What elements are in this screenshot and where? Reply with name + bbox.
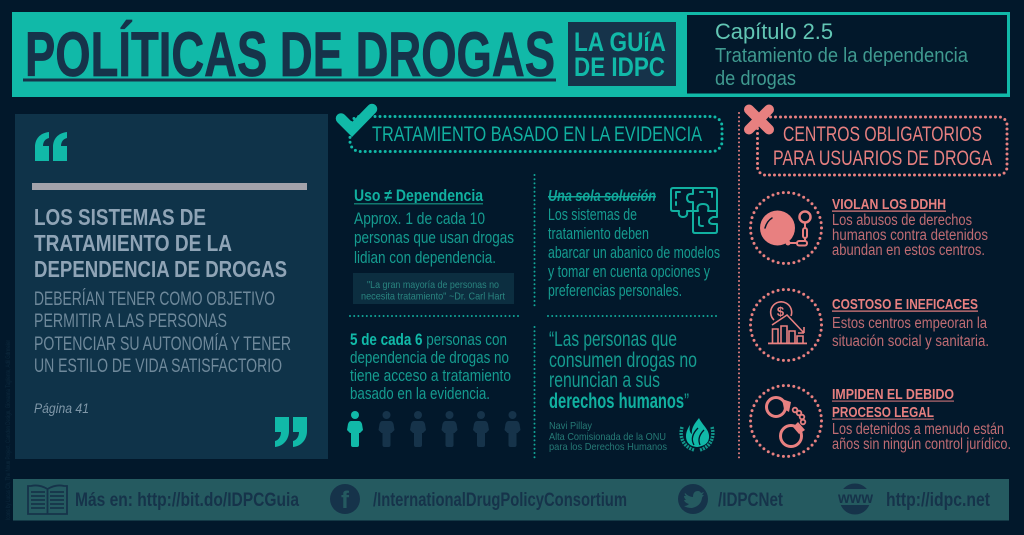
header banner bbox=[12, 12, 1010, 97]
credits: vertical faint text: Icons by Lucas Ch, The Noun Project, Camden Design, Giovanna Tagliente, Adil Gdrmeier bbox=[6, 340, 12, 520]
item: violate human rights: Los abusos de derechos bbox=[832, 212, 972, 229]
icon: UN human rights emblem bbox=[681, 418, 713, 450]
chart: 1 of 6 people pictogram bbox=[347, 411, 520, 447]
icon: closing quote bbox=[275, 417, 307, 447]
block: Navi Pillay quote bbox=[549, 328, 697, 453]
icon: web: www bbox=[837, 490, 874, 507]
callout: Carl Hart quote: "La gran mayoría de personas no bbox=[367, 279, 499, 291]
quote body: UN ESTILO DE VIDA SATISFACTORIO bbox=[34, 356, 282, 377]
block: use vs dependence: Uso ≠ Dependencia bbox=[354, 186, 483, 205]
quote body: PERMITIR A LAS PERSONAS bbox=[34, 311, 227, 332]
callout: Carl Hart quote: necesita tratamiento" ~Dr. Carl Hart bbox=[361, 290, 505, 302]
block: one-size solution: Una sola solución bbox=[548, 188, 656, 205]
footer link: twitter: /IDPCNet bbox=[718, 490, 784, 511]
guide badge: DE IDPC bbox=[574, 52, 665, 82]
block: one-size solution: tratamiento deben bbox=[548, 224, 649, 243]
quote body bbox=[34, 289, 291, 377]
block: Navi Pillay quote: para los Derechos Humanos bbox=[549, 441, 667, 453]
chapter box: Capítulo 2.5 bbox=[715, 19, 833, 44]
icon: facebook: f bbox=[341, 487, 350, 514]
chapter box bbox=[687, 15, 1007, 94]
icon: handcuffs bbox=[750, 386, 822, 456]
icon: puzzle bbox=[671, 188, 717, 233]
heading: evidence-based treatment bbox=[350, 116, 722, 152]
icon: facebook bbox=[330, 484, 360, 514]
panel: compulsory centres bbox=[739, 110, 1011, 458]
item: costly and ineffective: Estos centros empeoran la bbox=[832, 315, 987, 332]
footer bar bbox=[13, 479, 1009, 520]
panel: quote bbox=[15, 114, 328, 459]
heading: compulsory centres bbox=[758, 117, 1007, 175]
item: costly and ineffective: situación social y sanitaria. bbox=[832, 333, 989, 350]
divider bar bbox=[32, 183, 307, 190]
block: use vs dependence bbox=[354, 186, 514, 267]
page reference: Página 41 bbox=[34, 400, 89, 416]
block: one-size solution bbox=[548, 188, 720, 300]
footer link: facebook: /InternationalDrugPolicyConsortium bbox=[373, 490, 627, 511]
quote body: DEBERÍAN TENER COMO OBJETIVO bbox=[34, 289, 275, 310]
block: Navi Pillay quote: “Las personas que bbox=[549, 328, 677, 351]
item: impede due process: PROCESO LEGAL bbox=[832, 404, 934, 421]
block: access statistic: dependencia de drogas no bbox=[350, 348, 509, 367]
item: violate human rights: abundan en estos centros. bbox=[832, 242, 985, 259]
footer link: website: http://idpc.net bbox=[886, 490, 991, 511]
icon: check mark bbox=[341, 109, 372, 130]
guide badge bbox=[568, 22, 676, 86]
icon: opening quote bbox=[35, 132, 67, 161]
quote body: POTENCIAR SU AUTONOMÍA Y TENER bbox=[34, 334, 291, 355]
chapter box: de drogas bbox=[715, 68, 796, 90]
block: use vs dependence: Approx. 1 de cada 10 bbox=[354, 209, 485, 228]
chapter box: Tratamiento de la dependencia bbox=[715, 45, 969, 67]
heading: evidence-based treatment: TRATAMIENTO BASADO EN LA EVIDENCIA bbox=[372, 123, 702, 146]
item: costly and ineffective bbox=[750, 290, 989, 360]
block: use vs dependence: personas que usan drogas bbox=[354, 228, 514, 247]
block: Navi Pillay quote: derechos humanos” bbox=[549, 390, 689, 413]
quote heading: TRATAMIENTO DE LA bbox=[34, 230, 232, 256]
block: Navi Pillay quote: renuncian a sus bbox=[549, 369, 660, 392]
block: one-size solution: preferencias personales. bbox=[548, 281, 682, 300]
block: one-size solution: y tomar en cuenta opciones y bbox=[548, 262, 710, 281]
block: access statistic: 5 de cada 6 personas con bbox=[350, 330, 507, 349]
icon: falling cost chart bbox=[750, 290, 822, 360]
title: POLÍTICAS DE DROGAS bbox=[25, 20, 555, 90]
guide badge: LA GUíA bbox=[574, 27, 666, 57]
icon: open book bbox=[28, 485, 67, 514]
item: costly and ineffective: COSTOSO E INEFICACES bbox=[832, 296, 978, 313]
icon: X mark bbox=[749, 110, 769, 130]
icon: falling cost chart: $ bbox=[777, 304, 785, 319]
block: use vs dependence: lidian con dependencia. bbox=[354, 248, 496, 267]
quote heading: LOS SISTEMAS DE bbox=[34, 204, 206, 230]
icon: ball and chain bbox=[750, 192, 822, 264]
block: one-size solution: abarcar un abanico de modelos bbox=[548, 243, 720, 262]
item: violate human rights bbox=[750, 192, 988, 264]
quote heading bbox=[34, 204, 287, 282]
footer link: guide: Más en: http://bit.do/IDPCGuia bbox=[75, 490, 299, 511]
item: violate human rights: humanos contra detenidos bbox=[832, 227, 988, 244]
panel: evidence-based treatment bbox=[341, 109, 722, 460]
block: access statistic: basado en la evidencia. bbox=[350, 384, 490, 403]
block: Navi Pillay quote: Alta Comisionada de la ONU bbox=[549, 431, 666, 443]
block: Navi Pillay quote: consumen drogas no bbox=[549, 349, 697, 372]
block: access statistic bbox=[350, 330, 511, 403]
block: one-size solution: Los sistemas de bbox=[548, 205, 637, 224]
block: Navi Pillay quote: Navi Pillay bbox=[549, 420, 593, 432]
quote heading: DEPENDENCIA DE DROGAS bbox=[34, 256, 287, 282]
item: impede due process: IMPIDEN EL DEBIDO bbox=[832, 386, 954, 403]
item: impede due process bbox=[750, 386, 1011, 456]
item: violate human rights: VIOLAN LOS DDHH bbox=[832, 196, 946, 213]
icon: web bbox=[835, 484, 875, 514]
icon: twitter bbox=[678, 484, 708, 514]
block: access statistic: tiene acceso a tratamiento bbox=[350, 366, 511, 385]
callout: Carl Hart quote bbox=[353, 273, 514, 304]
